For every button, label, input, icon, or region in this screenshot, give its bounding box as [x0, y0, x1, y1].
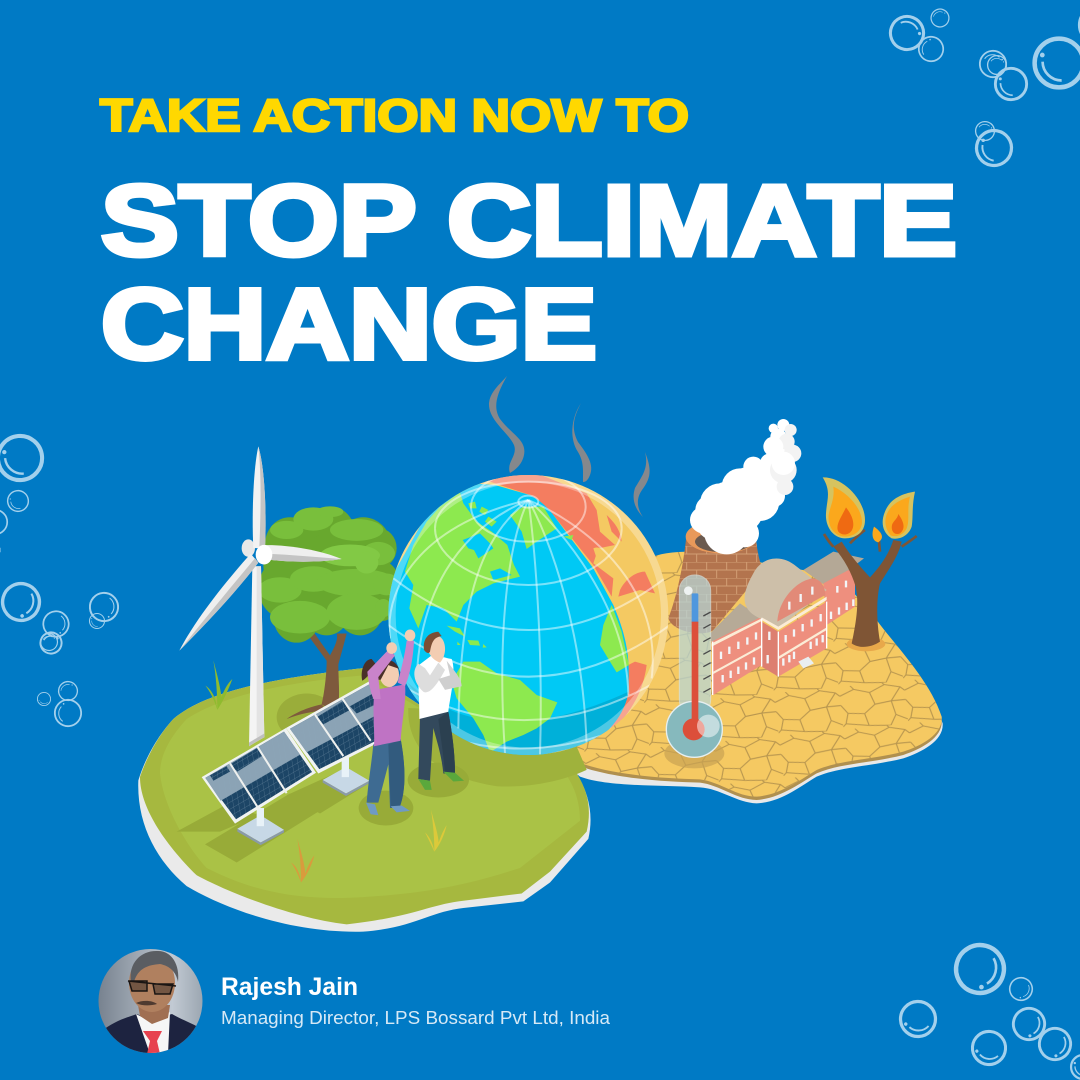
hair: [131, 951, 178, 982]
lower shadow band: [407, 682, 629, 758]
heading: stop climate change: [101, 165, 957, 380]
ocean: [380, 483, 629, 758]
greenland: [510, 507, 557, 549]
factory smoke: [690, 419, 801, 554]
dry cracked island: [576, 419, 943, 804]
factory building: [710, 552, 864, 695]
hudson bay: [463, 533, 493, 558]
globe rim: [392, 478, 665, 752]
north america: [405, 492, 520, 628]
island surface: [140, 668, 589, 924]
cooling tower: [668, 520, 763, 633]
south america: [452, 662, 557, 752]
flames: [823, 477, 915, 542]
shirt: [136, 1012, 170, 1054]
people: [362, 630, 464, 815]
wind turbine: [179, 446, 342, 746]
globe: [380, 472, 670, 758]
author portrait: [98, 949, 206, 1054]
moustache: [136, 1001, 157, 1005]
head: [129, 964, 175, 1012]
island lighter top: [160, 675, 580, 898]
hot regions: [480, 473, 615, 597]
island surface: [560, 552, 942, 797]
woman: [362, 630, 415, 815]
bubbles: top right: [885, 7, 1080, 168]
tie: [143, 1031, 162, 1054]
smoke wisps above globe: [489, 376, 650, 517]
island edge: [560, 555, 942, 800]
stands: [237, 757, 369, 845]
green island: [138, 446, 591, 932]
leafy tree: [258, 506, 400, 719]
solar panels: [202, 677, 378, 845]
burnt tree: [824, 530, 917, 651]
glasses: [128, 981, 176, 994]
dry cracks: [576, 552, 942, 796]
africa: [600, 605, 629, 672]
man: [414, 632, 464, 790]
heading: stop climate change: STOP CLIMATE: [101, 165, 957, 277]
caribbean: [447, 626, 487, 648]
island base: [560, 558, 943, 803]
island base: [138, 668, 591, 932]
heading: take action now to: TAKE ACTION NOW TO: [100, 90, 689, 141]
grass tufts: [205, 660, 447, 883]
suit: [106, 1014, 196, 1053]
author name: Rajesh Jain: [221, 973, 358, 1001]
shadows on grass: [177, 694, 587, 863]
thermometer: [664, 575, 724, 768]
panel two: [286, 677, 378, 773]
neck: [138, 1005, 170, 1024]
heading: stop climate change: CHANGE: [101, 268, 597, 380]
grid lines: [388, 472, 670, 754]
sphere: [388, 475, 668, 755]
panel one: [202, 728, 316, 824]
bubbles: left edge: [0, 434, 124, 732]
bubbles: bottom right: [893, 936, 1080, 1079]
arctic islands: [463, 500, 512, 538]
author role: Managing Director, LPS Bossard Pvt Ltd, India: [221, 1007, 611, 1028]
illustration: climate scene: [138, 376, 960, 932]
